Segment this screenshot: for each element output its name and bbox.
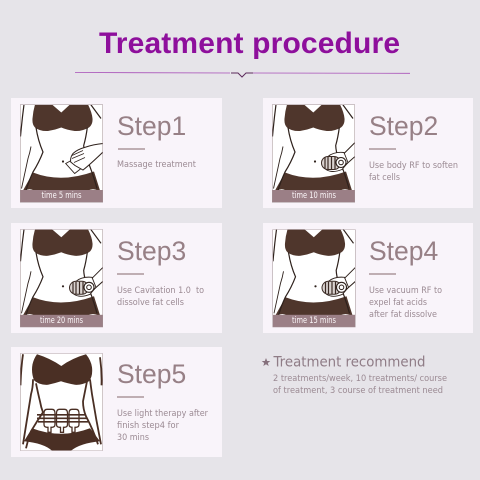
heading: Step3 (117, 236, 186, 266)
callout: treatment recommend (262, 354, 447, 396)
description: Use light therapy after (117, 408, 208, 419)
description: after fat dissolve (369, 309, 437, 320)
callout text (273, 373, 447, 396)
panel: step 4 (263, 223, 473, 333)
description: dissolve fat cells (117, 297, 184, 308)
heading: Step2 (369, 111, 438, 141)
panel: step 2 (263, 98, 473, 208)
icon: star (262, 358, 270, 366)
icon: cavitation illustration (20, 229, 103, 327)
icon: light therapy illustration (20, 353, 103, 451)
description: expel fat acids (369, 297, 427, 308)
description: Use vacuum RF to (369, 285, 442, 296)
description: Use Cavitation 1.0 to (117, 285, 204, 296)
description (117, 285, 204, 308)
description (369, 160, 458, 183)
time caption: time 10 mins (292, 191, 336, 201)
time caption: time 15 mins (292, 316, 336, 326)
callout heading: Treatment recommend (273, 354, 426, 370)
icon: vacuum RF illustration (272, 229, 356, 327)
callout text: 2 treatments/week, 10 treatments/ course (273, 373, 447, 384)
callout text: of treatment, 3 course of treatment need (273, 385, 443, 396)
panel: step 5 (11, 347, 222, 457)
description: fat cells (369, 172, 400, 183)
heading: Step5 (117, 359, 186, 389)
time caption: time 5 mins (42, 191, 82, 201)
panel: step 1 (11, 98, 222, 208)
description (117, 408, 208, 443)
description: Use body RF to soften (369, 160, 458, 171)
title: Treatment procedure (99, 27, 400, 60)
description: Massage treatment (117, 159, 196, 170)
description: 30 mins (117, 432, 149, 443)
description: finish step4 for (117, 420, 179, 431)
title divider with chevron (75, 72, 410, 77)
panel: step 3 (11, 223, 222, 333)
time caption: time 20 mins (40, 316, 83, 326)
icon: body RF illustration (272, 104, 355, 202)
description (369, 285, 442, 320)
icon: massage illustration (20, 104, 103, 202)
heading: Step1 (117, 111, 186, 141)
heading: Step4 (369, 236, 438, 266)
